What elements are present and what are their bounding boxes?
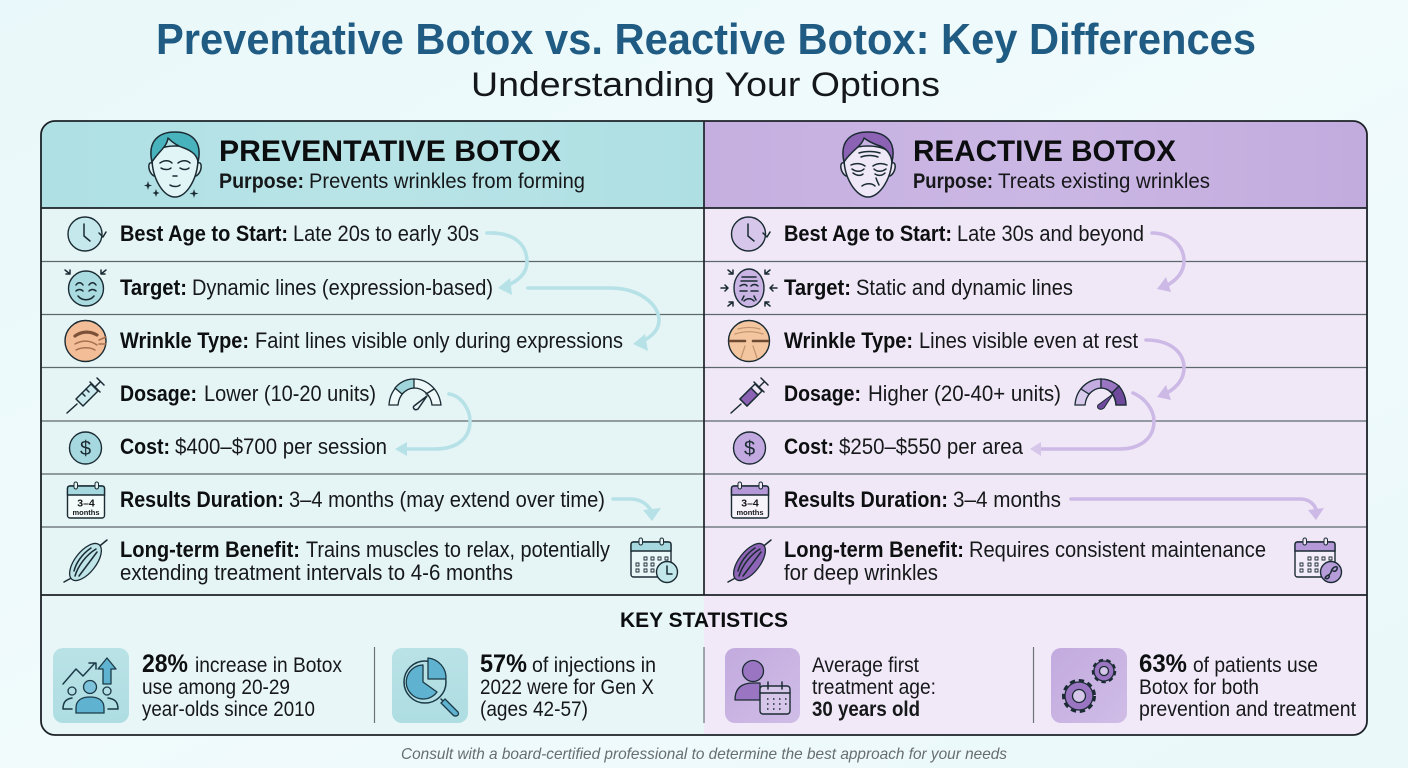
- text: 63% stat: [1139, 650, 1356, 721]
- stat: 63% both: [1051, 648, 1356, 723]
- text: wrinkle type: [784, 328, 1138, 353]
- icon: person with calendar: [725, 648, 800, 723]
- text: 28% stat: 28%: [142, 650, 188, 678]
- text: cost: $250–$550 per area: [839, 434, 1024, 459]
- text: wrinkle type: [120, 328, 623, 353]
- icon: growth group: [53, 648, 129, 723]
- icon: clock: [68, 217, 106, 251]
- text: best age: [120, 221, 479, 246]
- text: 63% stat: 63%: [1139, 650, 1187, 678]
- text: results duration: 3–4 months (may extend over time): [289, 487, 605, 512]
- icon: high dose gauge: [1075, 379, 1126, 409]
- title: Preventative Botox vs. Reactive Botox: Key Differences: [156, 15, 1256, 64]
- icon: filled syringe: [731, 378, 768, 413]
- text: 28% stat: [142, 650, 342, 721]
- text: best age: Best Age to Start:: [120, 221, 288, 246]
- text: 63% stat: of patients use: [1193, 653, 1318, 677]
- text: results duration: Results Duration:: [120, 487, 284, 512]
- footnote: Consult with a board-certified professional to determine the best approach for your needs: [401, 746, 1007, 763]
- text: target: Dynamic lines (expression-based): [192, 275, 493, 300]
- icon: reactive face: [841, 132, 895, 197]
- text: dosage: Dosage:: [784, 381, 861, 406]
- text: first treatment age: treatment age:: [812, 675, 936, 699]
- text: target: Target:: [784, 275, 851, 300]
- text: long-term benefit: Long-term Benefit:: [120, 537, 300, 562]
- panel: preventative rows: [64, 217, 678, 586]
- stat: 57% injections: [392, 648, 656, 723]
- text: first treatment age: [812, 653, 936, 721]
- text: results duration: Results Duration:: [784, 487, 948, 512]
- text: best age: Late 20s to early 30s: [293, 221, 479, 246]
- text: best age: Best Age to Start:: [784, 221, 952, 246]
- preventative heading: PREVENTATIVE BOTOX: [219, 135, 561, 168]
- text: best age: [784, 221, 1144, 246]
- icon: wrinkled face with arrows: [721, 269, 777, 307]
- text: wrinkle type: Wrinkle Type:: [784, 328, 913, 353]
- text: long-term benefit: extending treatment intervals to 4-6 months: [120, 560, 513, 585]
- icon: gears: [1051, 648, 1127, 723]
- text: target: Static and dynamic lines: [856, 275, 1073, 300]
- icon: 3-4 months calendar: [68, 482, 104, 518]
- text: 63% stat: prevention and treatment: [1139, 697, 1356, 721]
- preventative heading: [219, 135, 585, 193]
- stat: average first treatment age: [725, 648, 936, 723]
- text: target: Target:: [120, 275, 187, 300]
- icon: calendar with clock: [631, 538, 678, 582]
- stat dividers: [374, 647, 1034, 723]
- icon: dollar coin: [70, 432, 102, 464]
- preventative heading: Prevents wrinkles from forming: [309, 169, 585, 193]
- icon: smiling face: [65, 270, 106, 306]
- text: 57% stat: of injections in: [532, 653, 656, 677]
- icon: 3-4 months calendar: months: [736, 508, 764, 517]
- icon: 3-4 months calendar: [732, 482, 768, 518]
- text: dosage: Lower (10-20 units): [204, 381, 376, 406]
- text: long-term benefit: [784, 537, 1266, 585]
- text: 63% stat: Botox for both: [1139, 675, 1259, 699]
- text: best age: Late 30s and beyond: [957, 221, 1144, 246]
- arrows: reactive flow: [1030, 233, 1324, 520]
- icon: 3-4 months calendar: 3–4: [741, 498, 759, 510]
- text: cost: Cost:: [784, 434, 834, 459]
- text: long-term benefit: Long-term Benefit:: [784, 537, 964, 562]
- text: dosage: [784, 381, 1061, 406]
- icon: deep wrinkle skin: [728, 320, 770, 362]
- text: dosage: [120, 381, 376, 406]
- icon: calendar with maintenance badge: [1295, 538, 1342, 582]
- text: wrinkle type: Faint lines visible only during expressions: [255, 328, 623, 353]
- text: 57% stat: 2022 were for Gen X: [480, 675, 654, 699]
- icon: relaxed muscle: [64, 538, 107, 586]
- text: first treatment age: 30 years old: [812, 697, 920, 721]
- text: long-term benefit: Requires consistent maintenance: [969, 537, 1266, 562]
- icon: faint wrinkle skin: [65, 320, 106, 362]
- text: wrinkle type: Lines visible even at rest: [919, 328, 1138, 353]
- arrows: preventative flow: [395, 233, 661, 521]
- icon: 3-4 months calendar: months: [72, 508, 100, 517]
- stat: 28% increase: [53, 648, 342, 723]
- preventative heading: Purpose:: [219, 169, 304, 193]
- text: long-term benefit: for deep wrinkles: [784, 560, 938, 585]
- icon: dollar coin: $: [744, 438, 755, 460]
- reactive heading: Purpose:: [913, 169, 993, 193]
- icon: tense muscle: [728, 538, 771, 586]
- icon: dollar coin: [734, 432, 766, 464]
- text: dosage: Dosage:: [120, 381, 197, 406]
- text: cost: $400–$700 per session: [175, 434, 387, 459]
- text: 57% stat: (ages 42-57): [480, 697, 588, 721]
- text: dosage: Higher (20-40+ units): [868, 381, 1061, 406]
- heading: key statistics: KEY STATISTICS: [620, 609, 788, 632]
- icon: dollar coin: $: [80, 438, 91, 460]
- text: 28% stat: increase in Botox: [195, 653, 342, 677]
- icon: preventative face: [144, 132, 201, 198]
- text: 28% stat: use among 20-29: [142, 675, 290, 699]
- text: first treatment age: Average first: [812, 653, 919, 677]
- icon: pie chart magnifier: [392, 648, 468, 723]
- reactive heading: [913, 135, 1210, 193]
- reactive heading: REACTIVE BOTOX: [913, 135, 1176, 168]
- panel: reactive rows: [721, 217, 1342, 586]
- text: long-term benefit: Trains muscles to relax, potentially: [306, 537, 610, 562]
- icon: low dose gauge: [389, 379, 441, 410]
- icon: clock: [732, 217, 770, 251]
- text: results duration: [784, 487, 1061, 512]
- text: long-term benefit: [120, 537, 610, 585]
- text: cost: Cost:: [120, 434, 170, 459]
- text: wrinkle type: Wrinkle Type:: [120, 328, 249, 353]
- icon: syringe: [67, 378, 104, 413]
- subtitle: Understanding Your Options: [471, 66, 940, 104]
- text: 57% stat: 57%: [480, 650, 527, 678]
- text: results duration: 3–4 months: [953, 487, 1061, 512]
- text: 57% stat: [480, 650, 656, 721]
- text: results duration: [120, 487, 605, 512]
- reactive heading: Treats existing wrinkles: [998, 169, 1210, 193]
- icon: 3-4 months calendar: 3–4: [77, 498, 95, 510]
- comparison card background: [41, 121, 1367, 735]
- text: 28% stat: year-olds since 2010: [142, 697, 315, 721]
